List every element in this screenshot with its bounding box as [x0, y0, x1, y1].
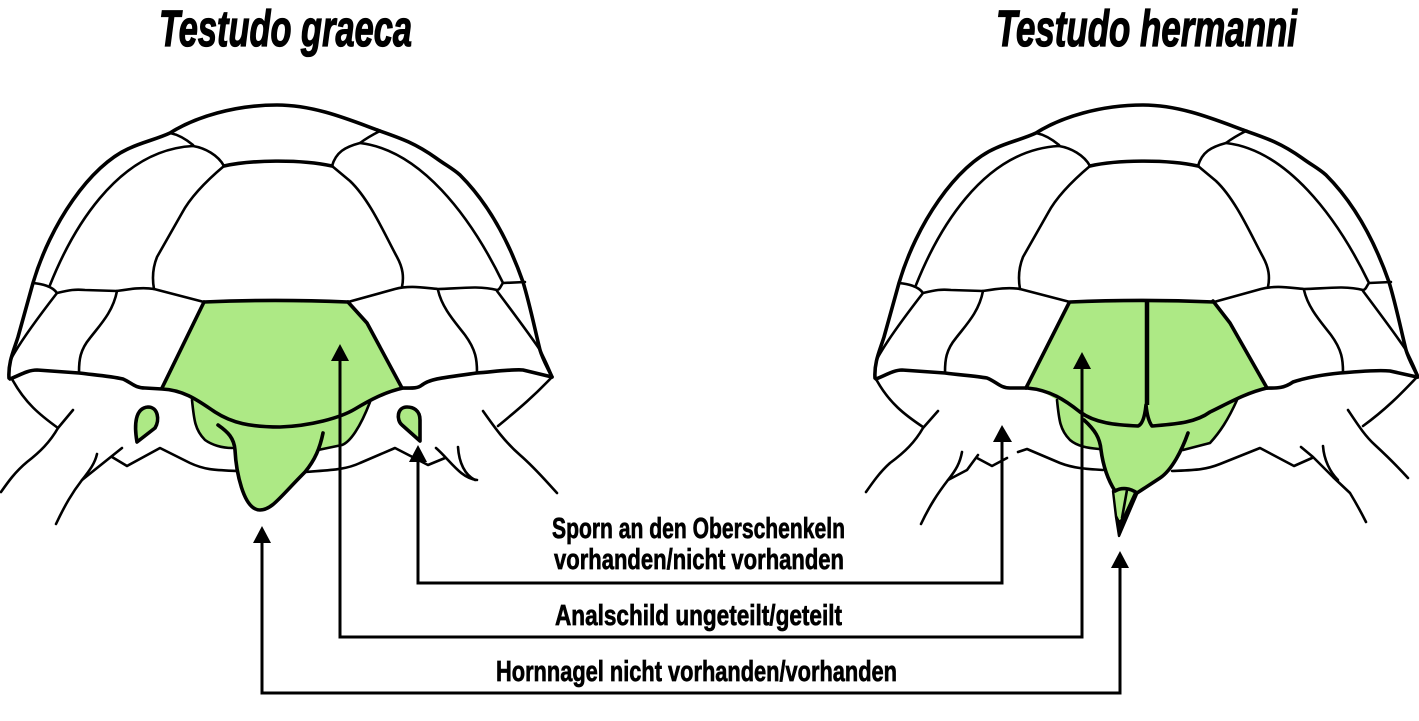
label: Analschild: Analschild ungeteilt/geteilt: [555, 600, 842, 632]
arrow: Analschild: [331, 344, 1091, 637]
arrow: Sporn: [409, 425, 1012, 583]
turtle shell: Testudo hermanni: [866, 105, 1418, 537]
carapace dome: [875, 105, 1418, 378]
carapace dome: [9, 105, 552, 388]
label: Hornnagel: Hornnagel nicht vorhanden/vorhanden: [496, 656, 897, 688]
green spur right: [398, 407, 420, 441]
horn nail at tail tip: [1113, 491, 1137, 536]
label: vorhanden/nicht vorhanden: vorhanden/nicht vorhanden: [554, 544, 844, 576]
turtle shell: Testudo graeca: [1, 105, 557, 524]
label: Sporn: Sporn an den Oberschenkeln: [552, 513, 845, 545]
lower edge and legs: [1018, 449, 1103, 470]
green anal scute and tail area: [162, 302, 402, 510]
lower scute outlines: [192, 400, 232, 448]
marginal band and anal seam: [876, 370, 1417, 426]
lower scute outlines: [1057, 400, 1099, 449]
green anal scutes and tail area: [1026, 301, 1267, 537]
marginal band and anal seam: [10, 370, 552, 427]
green spur left: [136, 407, 158, 442]
central divider of anal scute: [1145, 300, 1149, 405]
scute edges: [1026, 303, 1069, 388]
arrow: Hornnagel: [253, 526, 1129, 693]
title: Testudo graeca: Testudo graeca: [159, 0, 412, 57]
lower edge and legs: [112, 448, 237, 471]
